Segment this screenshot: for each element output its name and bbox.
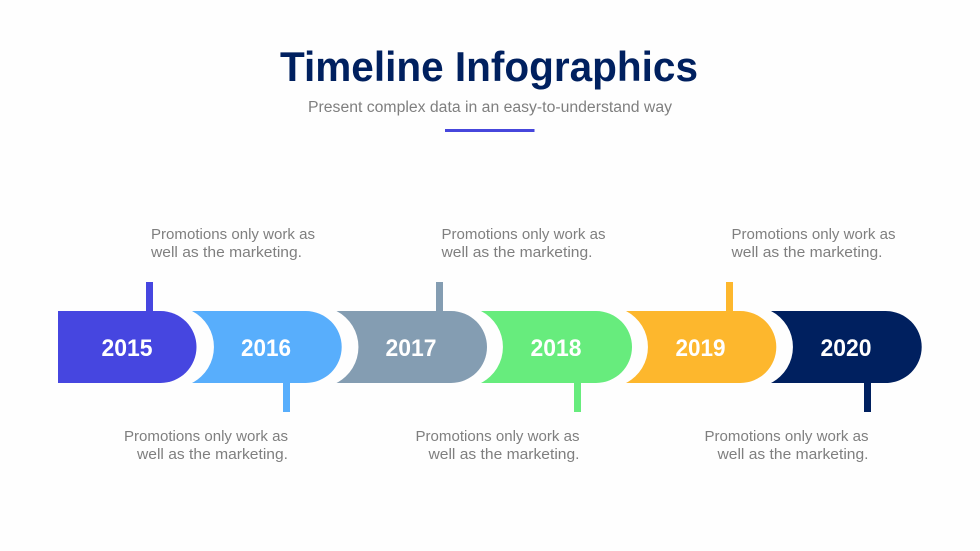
text block: 2020: Promotions only work as: [704, 428, 868, 445]
timeline step: 2019: [626, 282, 776, 383]
text block: 2018: Promotions only work as: [416, 428, 580, 445]
text block: 2015: [150, 226, 315, 261]
timeline step: 2016: [192, 311, 342, 412]
timeline step: 2016: 2016: [241, 335, 291, 362]
timeline step: 2017: 2017: [386, 335, 436, 362]
timeline step: 2020: 2020: [820, 335, 872, 362]
timeline step: 2017: [336, 282, 487, 383]
timeline step: 2015: 2015: [102, 335, 152, 362]
timeline step: 2019: 2019: [676, 335, 726, 362]
text block: 2017: well as the marketing.: [440, 244, 592, 261]
title underline: [445, 129, 534, 132]
text block: 2017: Promotions only work as: [442, 226, 606, 243]
text block: 2020: well as the marketing.: [716, 446, 868, 463]
subtitle: Present complex data in an easy-to-understand way: [308, 99, 672, 116]
text block: 2016: well as the marketing.: [136, 446, 288, 463]
text block: 2018: well as the marketing.: [427, 446, 580, 463]
timeline step: 2018: [481, 311, 632, 412]
text block: 2018: [416, 428, 580, 463]
text block: 2016: [124, 428, 288, 463]
text block: 2019: Promotions only work as: [732, 226, 896, 243]
text block: 2016: Promotions only work as: [124, 428, 288, 445]
text block: 2019: well as the marketing.: [730, 244, 882, 261]
timeline step: 2020: [771, 311, 922, 412]
text block: 2020: [704, 428, 868, 463]
timeline step: 2015: [58, 282, 196, 383]
text block: 2015: Promotions only work as: [151, 226, 315, 243]
timeline step: 2018: 2018: [530, 335, 582, 362]
text block: 2015: well as the marketing.: [150, 244, 302, 261]
text block: 2019: [730, 226, 896, 261]
title: Timeline Infographics: [280, 43, 698, 90]
text block: 2017: [440, 226, 606, 261]
